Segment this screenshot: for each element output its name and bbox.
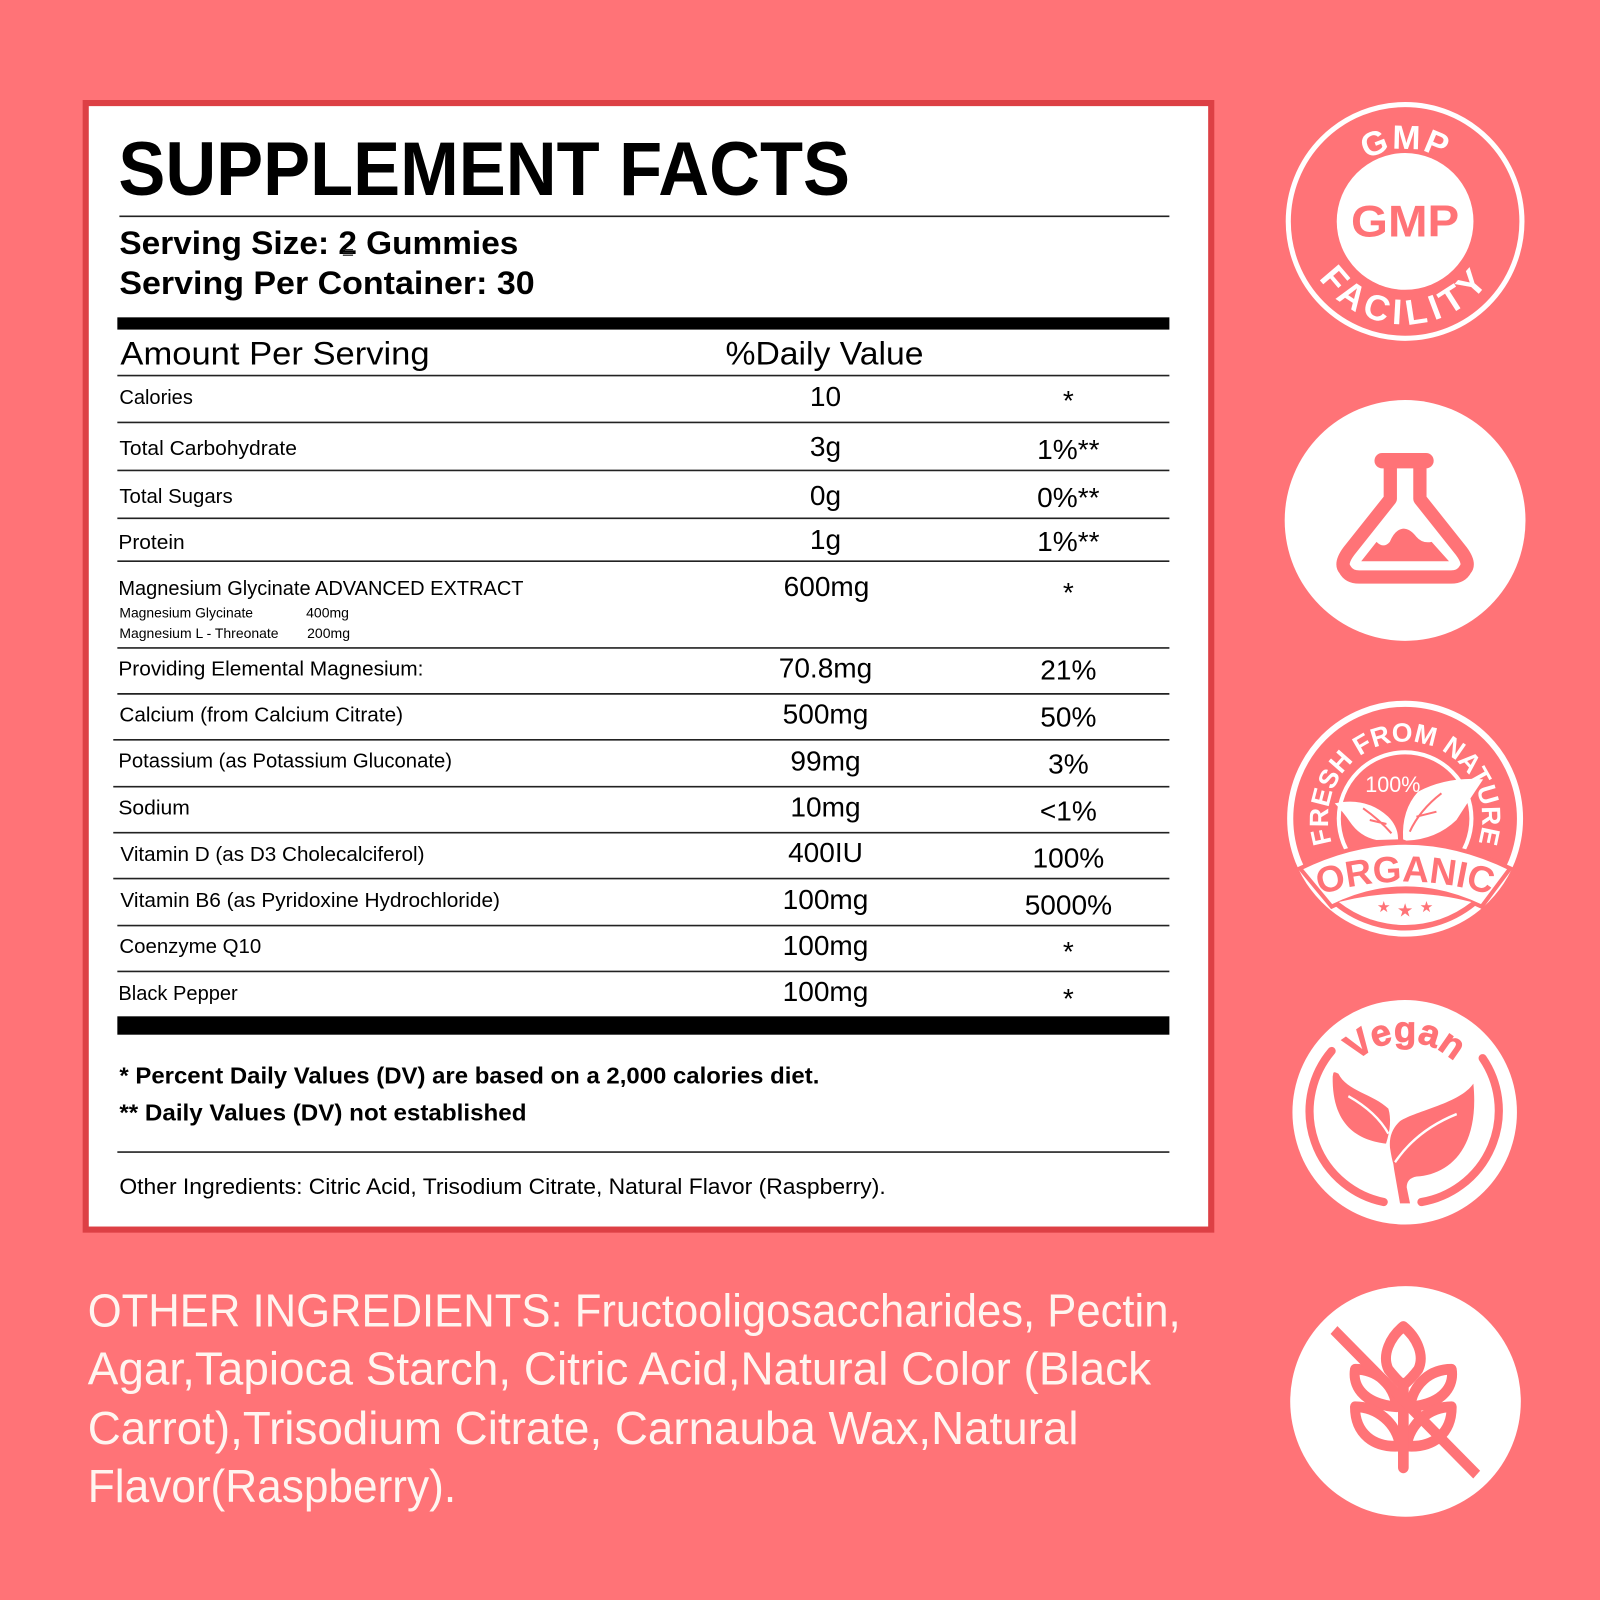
table header <box>120 334 923 371</box>
icon: vegan badge <box>1292 1000 1517 1224</box>
row: coenzyme q10: 100mg <box>783 930 868 961</box>
row: protein <box>118 524 1100 557</box>
footnotes <box>119 1063 819 1125</box>
icon: organic seal: ORGANIC <box>1317 856 1494 892</box>
row: sodium: 10mg <box>790 791 861 822</box>
other ingredients line: Other Ingredients: Citric Acid, Trisodium Citrate, Natural Flavor (Raspberry). <box>119 1174 886 1199</box>
row: protein: 1g <box>810 524 841 555</box>
row: sodium <box>118 791 1097 826</box>
table header: %Daily Value <box>726 334 923 371</box>
row: magnesium glycinate advanced extract: 400mg <box>306 605 349 620</box>
row: magnesium glycinate advanced extract <box>118 571 1074 641</box>
serving information: Serving Size: 2 Gummies <box>119 224 518 261</box>
row: potassium: Potassium (as Potassium Gluconate) <box>118 750 452 772</box>
row: vitamin d: 100% <box>1033 842 1104 873</box>
row: potassium: 99mg <box>790 745 861 776</box>
row: providing elemental magnesium: 21% <box>1040 655 1096 686</box>
icon: organic seal <box>1287 700 1524 937</box>
row: vitamin b6: Vitamin B6 (as Pyridoxine Hydrochloride) <box>120 890 500 912</box>
footnotes: ** Daily Values (DV) not established <box>119 1099 527 1125</box>
icon: gmp facility badge <box>1286 102 1524 341</box>
icon: lab flask <box>1285 400 1526 641</box>
row: vitamin d: 400IU <box>788 837 863 868</box>
row: calories: * <box>1063 385 1074 416</box>
row: vitamin b6: 5000% <box>1025 889 1112 920</box>
row: total carbohydrate: 3g <box>810 431 841 462</box>
footnotes: * Percent Daily Values (DV) are based on a 2,000 calories diet. <box>119 1063 819 1089</box>
row: providing elemental magnesium: Providing Elemental Magnesium: <box>118 659 423 681</box>
icon: gluten free wheat <box>1290 1286 1521 1517</box>
row: black pepper: * <box>1063 983 1074 1014</box>
row: magnesium glycinate advanced extract: Magnesium L - Threonate <box>119 626 279 641</box>
row: vitamin d: Vitamin D (as D3 Cholecalciferol) <box>120 844 424 866</box>
row: black pepper: 100mg <box>783 976 868 1007</box>
row: potassium <box>118 745 1089 779</box>
icon: organic seal: 100% <box>1365 772 1420 797</box>
serving information: Serving Per Container: 30 <box>119 264 535 301</box>
row: calories <box>119 381 1074 416</box>
row: calories: 10 <box>810 381 841 412</box>
panel: supplement facts <box>86 103 1211 1230</box>
row: total sugars: 0g <box>810 480 841 511</box>
row: total sugars: Total Sugars <box>119 486 233 508</box>
row: black pepper: Black Pepper <box>118 983 238 1005</box>
row: magnesium glycinate advanced extract: Magnesium Glycinate <box>119 605 253 620</box>
row: potassium: 3% <box>1048 748 1089 779</box>
row: total carbohydrate: Total Carbohydrate <box>119 438 297 460</box>
row: black pepper <box>118 976 1074 1014</box>
row: calcium: Calcium (from Calcium Citrate) <box>119 704 403 726</box>
row: total sugars <box>119 480 1100 513</box>
row: protein: Protein <box>118 532 185 554</box>
other ingredients paragraph: Flavor(Raspberry). <box>88 1460 456 1512</box>
icon: vegan badge: Vegan <box>1340 1022 1462 1060</box>
row: total carbohydrate: 1%** <box>1037 434 1100 465</box>
icon: organic seal: ★ <box>1397 900 1413 921</box>
serving information <box>119 224 535 301</box>
row: vitamin d <box>120 837 1104 873</box>
other ingredients paragraph: OTHER INGREDIENTS: Fructooligosaccharides, Pectin, <box>88 1285 1181 1337</box>
row: calcium: 500mg <box>783 698 868 729</box>
icon: gmp facility badge: FACILITY <box>1320 264 1482 325</box>
icon: organic seal: FRESH FROM NATURE <box>1310 723 1500 846</box>
row: providing elemental magnesium: 70.8mg <box>779 653 872 684</box>
icon: gmp facility badge: GMP <box>1351 196 1459 247</box>
row: magnesium glycinate advanced extract: 200mg <box>307 626 350 641</box>
row: total sugars: 0%** <box>1037 482 1100 513</box>
row: calcium: 50% <box>1040 702 1096 733</box>
icon: organic seal: ★ <box>1377 898 1391 916</box>
row: vitamin b6 <box>120 884 1112 920</box>
icon: organic seal: ★ <box>1420 898 1433 916</box>
row: calories: Calories <box>119 387 193 409</box>
row: sodium: <1% <box>1040 795 1097 826</box>
row: magnesium glycinate advanced extract: Magnesium Glycinate ADVANCED EXTRACT <box>118 578 523 600</box>
row: protein: 1%** <box>1037 526 1100 557</box>
row: providing elemental magnesium <box>118 653 1096 686</box>
other ingredients paragraph: Carrot),Trisodium Citrate, Carnauba Wax,Natural <box>88 1402 1079 1454</box>
other ingredients paragraph: Agar,Tapioca Starch, Citric Acid,Natural Color (Black <box>88 1343 1152 1395</box>
row: magnesium glycinate advanced extract: 600mg <box>784 571 869 602</box>
row: sodium: Sodium <box>118 797 190 819</box>
row: magnesium glycinate advanced extract: * <box>1063 577 1074 608</box>
row: total carbohydrate <box>119 431 1100 465</box>
other ingredients paragraph <box>88 1285 1181 1512</box>
row: coenzyme q10: * <box>1063 936 1074 967</box>
row: vitamin b6: 100mg <box>783 884 868 915</box>
row: coenzyme q10 <box>119 930 1074 967</box>
row: coenzyme q10: Coenzyme Q10 <box>119 936 261 958</box>
icon: gmp facility badge: GMP <box>1362 126 1448 156</box>
table header: Amount Per Serving <box>120 334 430 371</box>
title: SUPPLEMENT FACTS <box>118 127 850 212</box>
row: calcium <box>119 698 1096 733</box>
